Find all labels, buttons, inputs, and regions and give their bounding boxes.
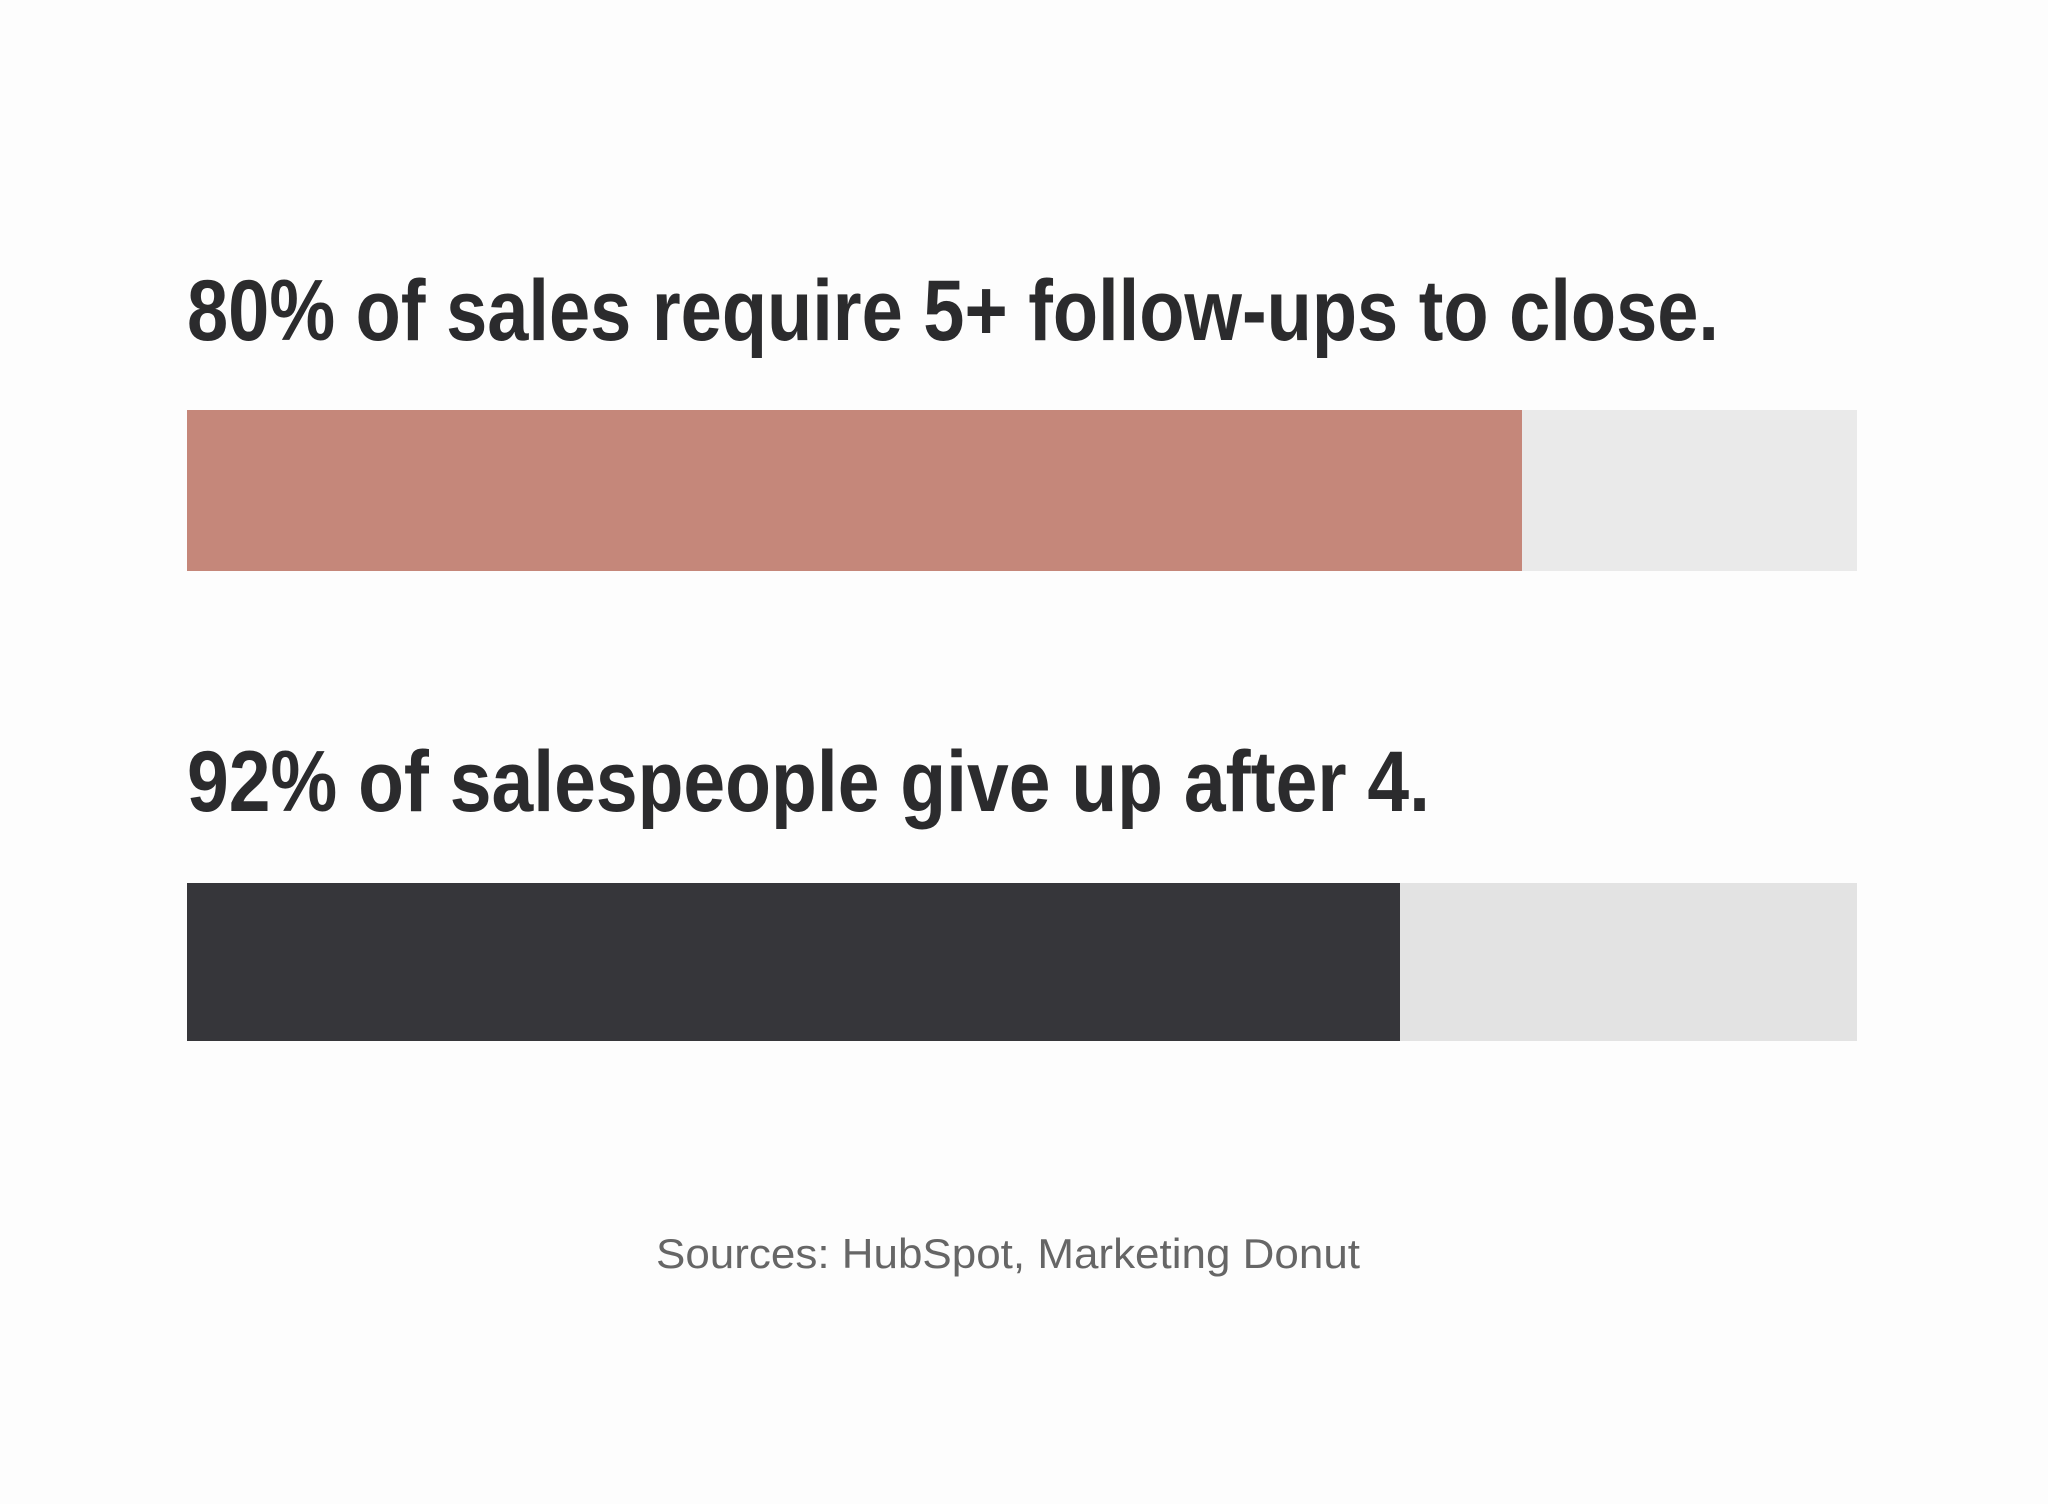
bar chart: 92% give up [187, 883, 1857, 1041]
bar chart: 80% follow-ups [187, 410, 1857, 571]
source note: Sources: HubSpot, Marketing Donut [656, 1230, 1360, 1277]
heading: 92% stat: 92% of salespeople give up after 4. [187, 734, 1430, 830]
heading: 80% stat: 80% of sales require 5+ follow-ups to close. [187, 263, 1719, 359]
